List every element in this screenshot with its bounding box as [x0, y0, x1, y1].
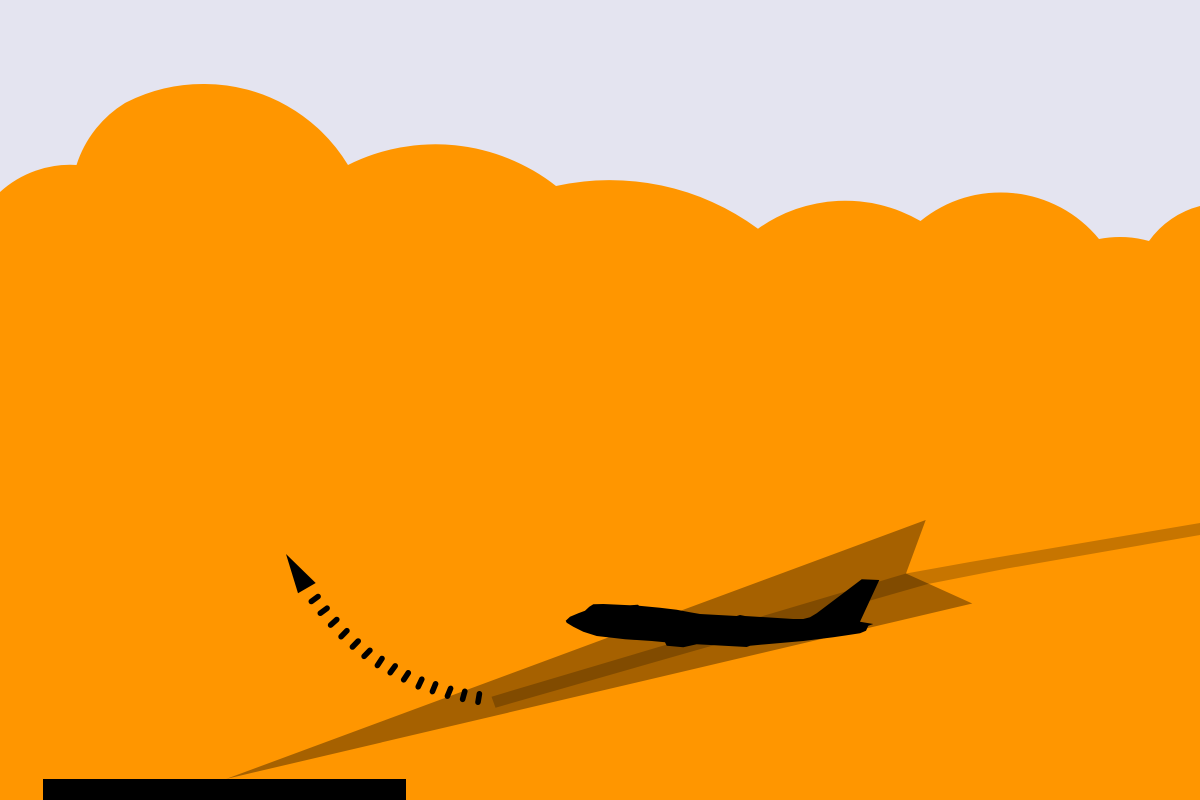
- arrowhead: [286, 554, 316, 593]
- runway bar: [43, 779, 406, 800]
- light beam shadow: [226, 520, 972, 779]
- dashed flight path: [311, 596, 479, 702]
- contrail: [492, 523, 1200, 708]
- aircraft silhouette: [566, 579, 879, 647]
